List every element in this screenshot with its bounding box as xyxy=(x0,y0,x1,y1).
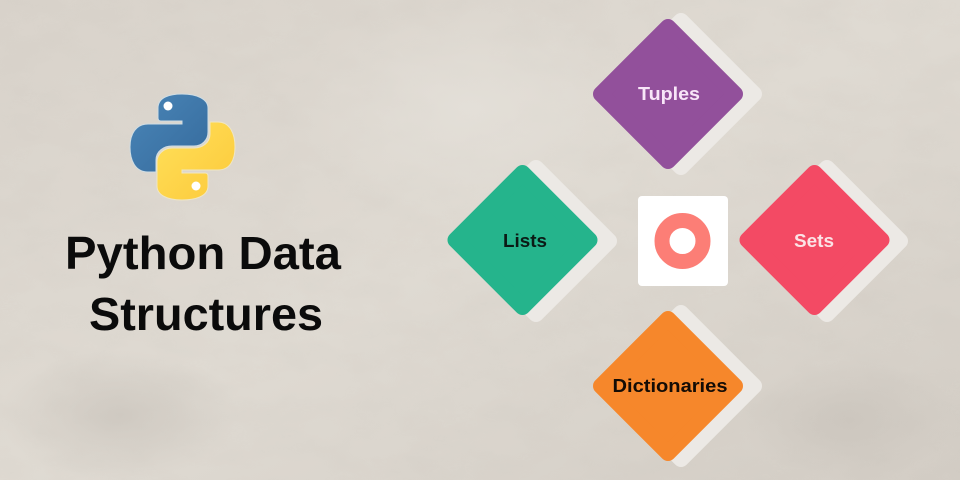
icon: python blue snake xyxy=(130,94,208,172)
diamond: Dictionaries: Dictionaries xyxy=(612,376,728,396)
diamond: Sets: Sets xyxy=(794,231,834,251)
diamond: Sets xyxy=(748,168,900,314)
diamond: Tuples: Tuples xyxy=(638,84,700,104)
diamond: Dictionaries xyxy=(601,313,754,459)
diamond: Lists xyxy=(456,168,609,314)
title: Python Data xyxy=(65,227,341,279)
icon: coral ring xyxy=(662,220,703,262)
diamond: Lists: Lists xyxy=(503,231,547,251)
icon: python snake eyes xyxy=(164,102,200,190)
center icon tile xyxy=(638,196,728,286)
title xyxy=(65,227,341,340)
diamond: Tuples xyxy=(601,21,754,167)
icon: python logo xyxy=(130,94,235,200)
title: Structures xyxy=(89,288,323,340)
icon: python yellow snake xyxy=(157,122,235,200)
